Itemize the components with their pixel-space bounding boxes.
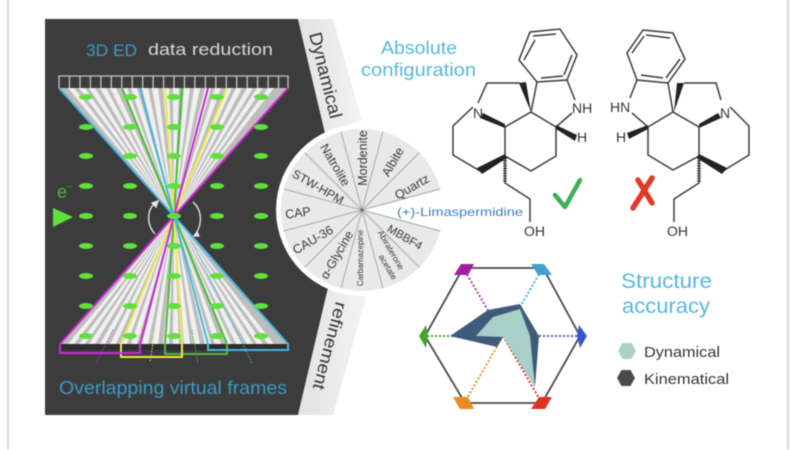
molecule: incorrect enantiomer: [610, 30, 749, 239]
legend: [617, 343, 729, 388]
sample labels: Natrolite: [317, 141, 353, 189]
diffraction fan: upper: [59, 88, 288, 216]
molecule: correct enantiomer: OH: [524, 223, 545, 239]
heading: overlapping virtual frames: Overlapping virtual frames: [59, 378, 287, 398]
heading: 3D ED data reduction: 3D ED: [86, 41, 137, 60]
radar axis markers: [419, 264, 587, 409]
heading: absolute configuration: configuration: [361, 60, 476, 80]
molecule: correct enantiomer: [453, 29, 592, 239]
diffraction fan: lower: [60, 216, 288, 344]
molecule: correct enantiomer: N: [473, 105, 483, 121]
electron beam label: [53, 182, 73, 227]
virtual frame lines: [59, 88, 288, 357]
sample labels: α-Glycine: [318, 228, 356, 281]
label: refinement: refinement: [309, 300, 350, 392]
rotation arrows: [149, 201, 200, 236]
band: dynamical refinement: [298, 19, 366, 415]
sample labels: STW-HPM: [290, 167, 346, 207]
radar chart: [419, 264, 587, 409]
sample labels: CAU-36: [290, 223, 336, 257]
detector comb: [59, 76, 288, 88]
dotted frame leaders: [96, 238, 252, 363]
heading: absolute configuration: [361, 38, 476, 80]
fan stripes: [68, 88, 274, 344]
label: Dynamical: Dynamical: [305, 30, 346, 120]
molecule: incorrect enantiomer: H: [616, 129, 626, 145]
legend: dynamical: Dynamical: [644, 344, 720, 361]
electron beam label: e: [57, 182, 67, 202]
diffraction spots: [79, 94, 268, 339]
sample labels: Abiraterone: [376, 228, 406, 272]
molecule: correct enantiomer: NH: [572, 100, 592, 116]
sample labels: Mordenite: [356, 130, 370, 186]
wheel of samples: [276, 124, 523, 296]
molecule: incorrect enantiomer: HN: [610, 99, 630, 115]
sample labels: acetate: [377, 252, 399, 282]
heading: absolute configuration: Absolute: [381, 38, 457, 58]
sample labels: CAP: [284, 204, 312, 222]
heading: structure accuracy: accuracy: [622, 295, 711, 318]
heading: structure accuracy: Structure: [621, 270, 712, 293]
electron beam label: −: [67, 182, 73, 193]
detector strip: bottom: [60, 344, 288, 350]
heading: structure accuracy: [621, 270, 712, 318]
dynamical polygon: [476, 309, 535, 387]
sample labels: Carbamazepine: [356, 229, 365, 286]
label: limaspermidine: (+)-Limaspermidine: [397, 205, 523, 219]
icon: green check: [555, 180, 580, 207]
molecule: correct enantiomer: H: [577, 129, 587, 145]
sample labels: MBBF4: [385, 223, 425, 253]
legend: kinematical: Kinematical: [644, 371, 729, 388]
heading: 3D ED data reduction: data reduction: [148, 40, 273, 59]
molecule: incorrect enantiomer: OH: [667, 223, 688, 239]
molecule: incorrect enantiomer: N: [720, 105, 730, 121]
icon: red cross: [633, 178, 652, 208]
kinematical polygon: [450, 304, 539, 387]
sample labels: Quartz: [392, 172, 432, 202]
sample labels: Albite: [379, 145, 407, 179]
heading: 3D ED data reduction: [86, 40, 273, 60]
sample labels: [284, 130, 432, 286]
radar axes: [427, 271, 578, 400]
panel: dark data reduction background: [45, 19, 335, 415]
